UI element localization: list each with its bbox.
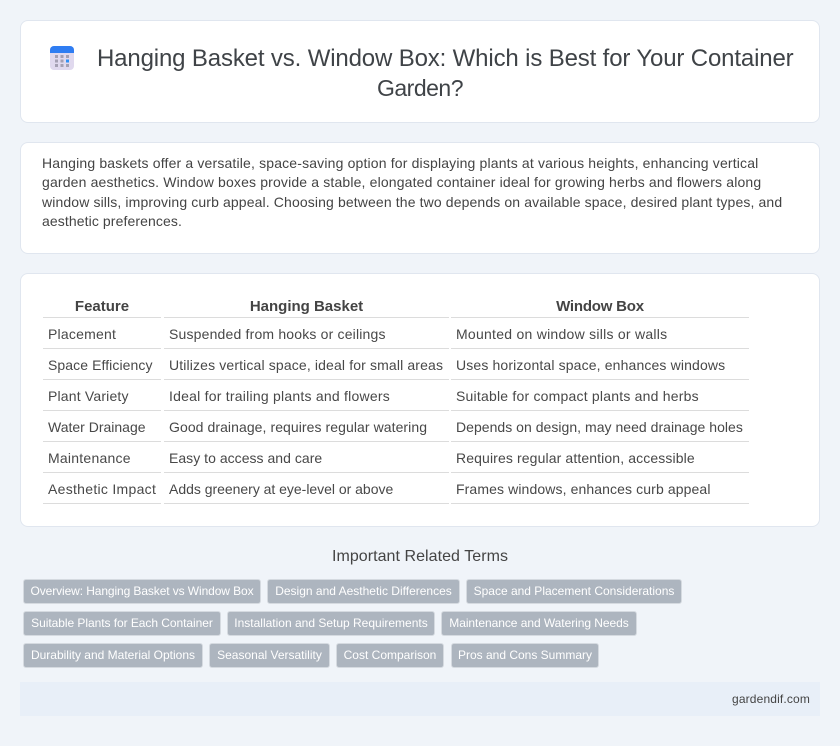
table header: window box: Window Box: [556, 298, 644, 315]
footer bar: [20, 682, 820, 716]
intro text: window sills, improving curb appeal. Choosing between the two depends on available space, desired plant types, and: [42, 194, 782, 210]
row: water drainage: [48, 419, 743, 435]
tag: cost: Cost Comparison: [344, 648, 436, 662]
row: placement: Mounted on window sills or walls: [456, 326, 667, 342]
tag: overview: Overview: Hanging Basket vs Window Box: [31, 584, 253, 598]
tag: durability: [23, 643, 203, 668]
row: water drainage: Water Drainage: [48, 419, 146, 435]
tag: maintenance: Maintenance and Watering Needs: [449, 616, 629, 630]
row: plant variety: Ideal for trailing plants and flowers: [169, 388, 390, 404]
tag: space: [466, 579, 682, 604]
intro text: garden aesthetics. Window boxes provide a stable, elongated container ideal for growing herbs and flowers along: [42, 174, 761, 190]
title: Garden?: [377, 75, 463, 101]
intro card: [20, 142, 820, 254]
icon: calendar: [50, 46, 74, 70]
title: [97, 45, 794, 101]
tag: suitable plants: [23, 611, 221, 636]
row: aesthetic impact: Adds greenery at eye-level or above: [169, 481, 393, 497]
tag: installation: [227, 611, 435, 636]
table header: hanging basket: Hanging Basket: [250, 298, 363, 315]
row: maintenance: Maintenance: [48, 450, 131, 466]
tag: suitable plants: Suitable Plants for Each Container: [31, 616, 213, 630]
tag: maintenance: [441, 611, 637, 636]
row: water drainage: Good drainage, requires regular watering: [169, 419, 427, 435]
intro text: [42, 155, 782, 229]
row: placement: [48, 326, 667, 342]
row: aesthetic impact: Frames windows, enhances curb appeal: [456, 481, 711, 497]
row: maintenance: Easy to access and care: [169, 450, 322, 466]
row: maintenance: Requires regular attention, accessible: [456, 450, 695, 466]
row: aesthetic impact: [48, 481, 711, 497]
row: space efficiency: [48, 357, 725, 373]
related terms heading: Important Related Terms: [332, 548, 508, 565]
row: placement: Suspended from hooks or ceilings: [169, 326, 386, 342]
related terms tags: [23, 579, 682, 668]
tag: space: Space and Placement Considerations: [474, 584, 674, 598]
row: space efficiency: Space Efficiency: [48, 357, 153, 373]
row: space efficiency: Uses horizontal space, enhances windows: [456, 357, 725, 373]
tag: seasonal: Seasonal Versatility: [217, 648, 322, 662]
row: space efficiency: Utilizes vertical space, ideal for small areas: [169, 357, 443, 373]
title: Hanging Basket vs. Window Box: Which is Best for Your Container: [97, 45, 794, 72]
intro text: aesthetic preferences.: [42, 213, 182, 229]
tag: design: [267, 579, 460, 604]
tag: durability: Durability and Material Options: [31, 648, 195, 662]
table header: feature: Feature: [75, 298, 129, 315]
row: plant variety: [48, 388, 699, 404]
row: water drainage: Depends on design, may need drainage holes: [456, 419, 743, 435]
tag: pros and cons: Pros and Cons Summary: [458, 648, 592, 662]
table card: [20, 273, 820, 527]
tag: cost: [336, 643, 444, 668]
row: plant variety: Suitable for compact plants and herbs: [456, 388, 699, 404]
row: maintenance: [48, 450, 695, 466]
tag: seasonal: [209, 643, 330, 668]
title card: [20, 20, 820, 123]
tag: design: Design and Aesthetic Differences: [275, 584, 452, 598]
row: plant variety: Plant Variety: [48, 388, 129, 404]
tag: pros and cons: [451, 643, 599, 668]
row: aesthetic impact: Aesthetic Impact: [48, 481, 156, 497]
tag: installation: Installation and Setup Requirements: [234, 616, 428, 630]
tag: overview: [23, 579, 261, 604]
intro text: Hanging baskets offer a versatile, space-saving option for displaying plants at various heights, enhancing vertical: [42, 155, 758, 171]
row: placement: Placement: [48, 326, 116, 342]
footer credit: gardendif.com: [732, 692, 810, 706]
